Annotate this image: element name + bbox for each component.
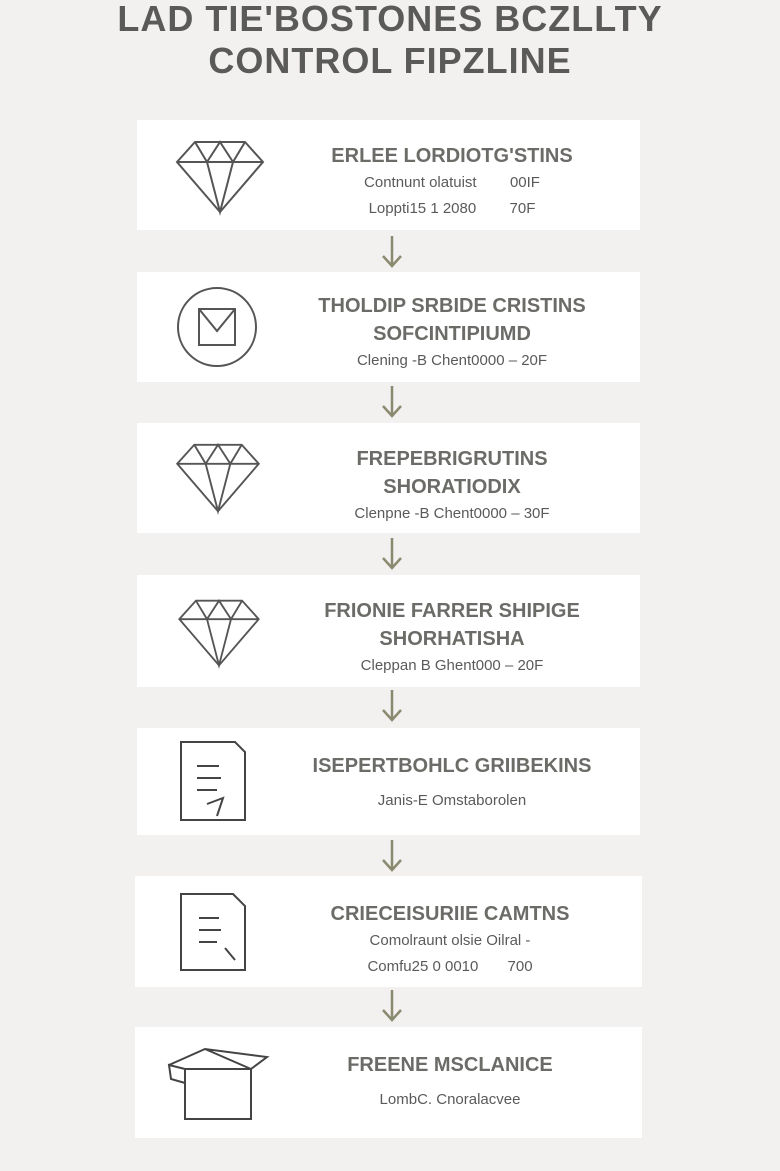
icon: document bbox=[180, 741, 246, 821]
arrow bbox=[382, 840, 402, 872]
title: CONTROL FIPZLINE bbox=[208, 40, 572, 81]
icon: circle mail bbox=[177, 287, 257, 367]
text: FRIONIE FARRER SHIPIGE bbox=[324, 600, 580, 622]
text bbox=[313, 755, 591, 809]
text: SOFCINTIPIUMD bbox=[373, 323, 531, 345]
title bbox=[117, 0, 663, 81]
text: Loppti15 1 2080 70F bbox=[369, 200, 535, 217]
text: SHORATIODIX bbox=[383, 476, 521, 498]
text bbox=[354, 448, 550, 522]
icon: box bbox=[168, 1048, 270, 1120]
text bbox=[331, 903, 569, 975]
text: Cleppan B Ghent000 – 20F bbox=[361, 657, 543, 674]
text: FREPEBRIGRUTINS bbox=[356, 448, 548, 470]
card 4 bbox=[137, 575, 640, 687]
text: THOLDIP SRBIDE CRISTINS bbox=[318, 295, 586, 317]
text bbox=[318, 295, 586, 369]
text: Janis-E Omstaborolen bbox=[378, 792, 526, 809]
card 2 bbox=[137, 272, 640, 382]
icon: diamond bbox=[178, 599, 260, 669]
card 3 bbox=[137, 423, 640, 533]
card 6 bbox=[135, 876, 642, 987]
arrow bbox=[382, 538, 402, 570]
text: CRIECEISURIIE CAMTNS bbox=[331, 903, 569, 925]
arrow bbox=[382, 990, 402, 1022]
icon: diamond bbox=[176, 140, 264, 216]
text: ISEPERTBOHLC GRIIBEKINS bbox=[313, 755, 591, 777]
text bbox=[347, 1054, 553, 1108]
text: ERLEE LORDIOTG'STINS bbox=[331, 145, 573, 167]
text: SHORHATISHA bbox=[379, 628, 525, 650]
text bbox=[331, 145, 573, 217]
arrow bbox=[382, 386, 402, 418]
card 7 bbox=[135, 1027, 642, 1138]
icon: document bbox=[180, 893, 246, 971]
arrow bbox=[382, 236, 402, 268]
text: FREENE MSCLANICE bbox=[347, 1054, 553, 1076]
text: Contnunt olatuist 00IF bbox=[364, 174, 540, 191]
card 1 bbox=[137, 120, 640, 230]
text: Clening -B Chent0000 – 20F bbox=[357, 352, 547, 369]
card 5 bbox=[137, 728, 640, 835]
text: LombC. Cnoralacvee bbox=[380, 1091, 520, 1108]
arrow bbox=[382, 690, 402, 722]
text bbox=[324, 600, 580, 674]
icon: diamond bbox=[176, 443, 260, 515]
text: Comolraunt olsie Oilral - bbox=[370, 932, 530, 949]
text: Clenpne -B Chent0000 – 30F bbox=[354, 505, 550, 522]
text: Comfu25 0 0010 700 bbox=[367, 958, 533, 975]
